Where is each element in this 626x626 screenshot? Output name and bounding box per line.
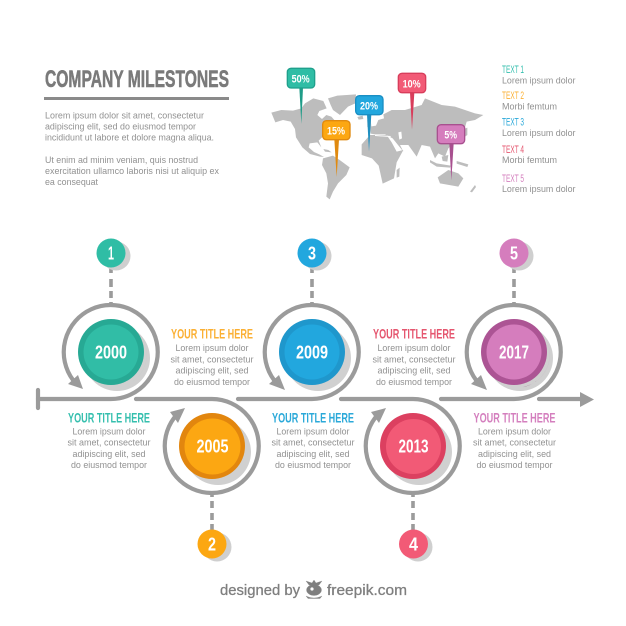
caption: red: YOUR TITLE HERE (373, 326, 455, 342)
milestone 2009 (279, 319, 351, 391)
caption: blue (272, 410, 354, 470)
legend: TEXT 4 (502, 144, 524, 156)
number badge 1: 1 (108, 244, 114, 264)
ring 2005 (136, 399, 259, 493)
legend: TEXT 1 (502, 64, 524, 76)
milestone 2005: 2005 (196, 436, 228, 456)
pin: 5% (437, 125, 465, 180)
caption: pink (473, 410, 556, 470)
number badge 4 (399, 530, 432, 562)
intro text block: Ut enim ad minim veniam, quis nostrud (45, 155, 198, 165)
start tick (36, 390, 40, 408)
intro text block: ea consequat (45, 177, 98, 187)
legend: TEXT 3 (502, 116, 524, 128)
milestone 2017: 2017 (499, 342, 529, 362)
caption: orange: Lorem ipsum dolor (176, 343, 248, 353)
map: continents (271, 94, 483, 199)
world map with pins (271, 68, 483, 199)
timeline path rings (38, 305, 582, 493)
pin: 15%: 15% (327, 126, 345, 138)
pin: 5%: 5% (444, 130, 457, 142)
pin: 50%: 50% (292, 73, 310, 85)
legend: Lorem ipsum dolor (502, 76, 576, 86)
caption: pink: sit amet, consectetur (473, 438, 556, 448)
arrowheads (68, 375, 594, 423)
number badge 3: 3 (308, 244, 316, 264)
number badge 1 (96, 238, 130, 270)
caption: red: do eiusmod tempor (376, 377, 452, 387)
pin: 20% (356, 96, 383, 152)
ring 2000 (38, 305, 158, 399)
legend: TEXT 2 (502, 90, 524, 102)
intro text block: exercitation ullamco laboris nisi ut aliquip ex (45, 166, 219, 176)
caption: red: sit amet, consectetur (372, 354, 456, 364)
milestone 2013: 2013 (398, 436, 428, 456)
legend: Morbi femtum (502, 102, 557, 112)
caption: orange: sit amet, consectetur (170, 354, 254, 364)
milestone 2000: 2000 (95, 342, 127, 362)
milestone 2000 (78, 319, 150, 391)
caption: pink: adipiscing elit, sed (478, 449, 551, 459)
ring 2017 (441, 305, 561, 399)
caption: teal: adipiscing elit, sed (72, 449, 146, 459)
final line (539, 397, 582, 401)
map: inland seas (375, 132, 402, 140)
number badge 5 (500, 238, 534, 270)
caption: pink: do eiusmod tempor (476, 460, 552, 470)
caption: orange (170, 326, 254, 387)
caption: orange: YOUR TITLE HERE (171, 326, 253, 342)
intro text block: Lorem ipsum dolor sit amet, consectetur (45, 110, 204, 120)
number badge 4: 4 (409, 534, 418, 554)
footer credit: designed by (220, 582, 300, 599)
pin: 15% (323, 121, 350, 177)
number badge 5: 5 (510, 244, 518, 264)
legend (502, 64, 576, 194)
legend: Lorem ipsum dolor (502, 128, 576, 138)
pin: 50% (287, 68, 315, 124)
caption: orange: do eiusmod tempor (174, 377, 250, 387)
pin: 10%: 10% (403, 79, 421, 91)
footer credit (220, 580, 407, 599)
caption: teal: do eiusmod tempor (71, 460, 147, 470)
footer credit: freepik.com (327, 582, 407, 599)
intro text block (45, 110, 219, 187)
caption: teal: YOUR TITLE HERE (68, 410, 150, 426)
caption: teal: Lorem ipsum dolor (72, 426, 146, 436)
title: COMPANY MILESTONES (45, 66, 229, 93)
pin: 10% (398, 73, 426, 130)
caption: blue: adipiscing elit, sed (276, 449, 350, 459)
caption: teal: sit amet, consectetur (68, 438, 150, 448)
caption: red (372, 326, 456, 387)
pin: 20%: 20% (360, 101, 378, 113)
milestone 2009: 2009 (296, 342, 328, 362)
ring 2009 (238, 305, 359, 399)
icon: freepik logo (306, 580, 322, 598)
intro text block: adipiscing elit, sed do eiusmod tempor (45, 122, 196, 132)
legend: TEXT 5 (502, 173, 524, 185)
number badge 2: 2 (208, 534, 216, 554)
caption: red: Lorem ipsum dolor (378, 343, 450, 353)
legend: Morbi femtum (502, 155, 557, 165)
intro text block: incididunt ut labore et dolore magna aliqua. (45, 132, 214, 142)
caption: blue: do eiusmod tempor (275, 460, 351, 470)
number badge 3 (298, 238, 332, 270)
caption: pink: YOUR TITLE HERE (474, 410, 556, 426)
milestone 2013 (380, 413, 452, 485)
caption: red: adipiscing elit, sed (378, 366, 450, 376)
ring 2013 (341, 399, 460, 493)
dashed connectors (111, 268, 514, 530)
caption: blue: sit amet, consectetur (272, 438, 354, 448)
milestone 2017 (481, 319, 553, 391)
caption: teal (68, 410, 150, 470)
legend: Lorem ipsum dolor (502, 184, 576, 194)
caption: blue: Lorem ipsum dolor (276, 426, 350, 436)
caption: blue: YOUR TITLE HERE (272, 410, 354, 426)
caption: pink: Lorem ipsum dolor (478, 426, 551, 436)
caption: orange: adipiscing elit, sed (176, 366, 248, 376)
number badge 2 (198, 530, 232, 562)
milestone 2005 (179, 413, 251, 485)
title underline (44, 97, 229, 100)
